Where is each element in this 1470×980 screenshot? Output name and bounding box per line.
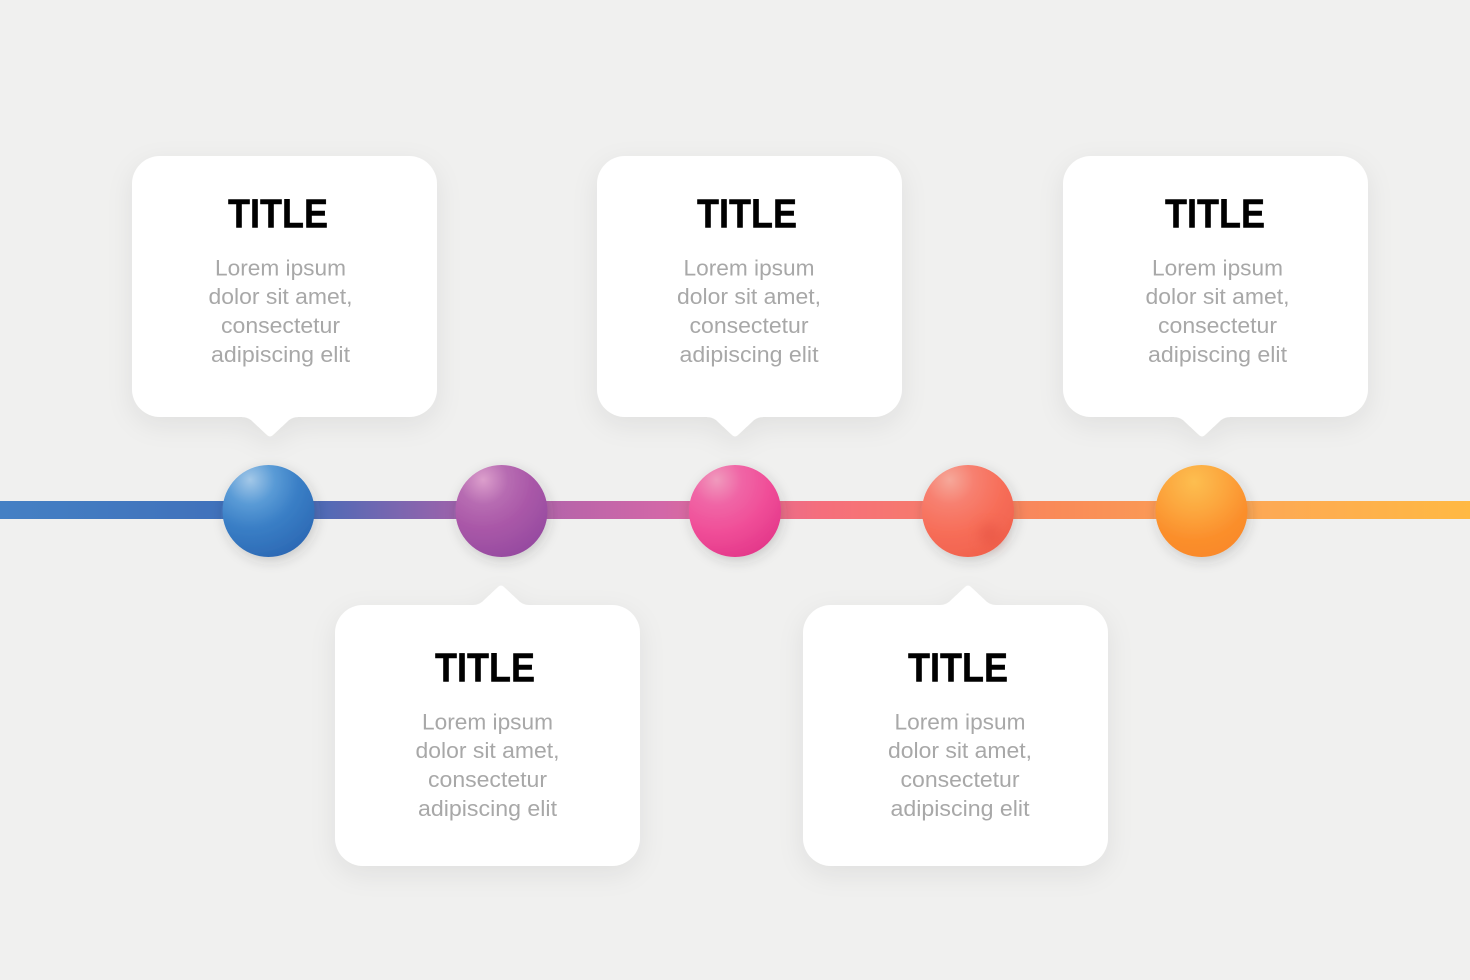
icon: orange sphere <box>1156 465 1248 557</box>
card 1 title: TITLE <box>228 190 328 236</box>
panel: card 4 <box>803 586 1108 866</box>
card 5 shape <box>1063 156 1368 436</box>
card 1 body text: consectetur <box>221 313 341 338</box>
card 1 shape <box>132 156 437 436</box>
card 2 body text: dolor sit amet, <box>416 738 560 763</box>
card 2 body text <box>416 710 560 821</box>
card 1 body text: dolor sit amet, <box>208 284 352 309</box>
card 2 title: TITLE <box>435 644 535 690</box>
card 2 body text: consectetur <box>428 767 548 792</box>
panel: card 2 <box>335 586 640 866</box>
card 2 shape <box>335 586 640 866</box>
icon: pink sphere <box>689 465 781 557</box>
card 4 body text: dolor sit amet, <box>888 738 1032 763</box>
icon: blue sphere <box>222 465 314 557</box>
panel: card 5 <box>1063 156 1368 436</box>
card 3 body text: consectetur <box>690 313 809 338</box>
card 1 body text <box>208 256 352 367</box>
card 1 body text: Lorem ipsum <box>215 256 346 280</box>
card 4 body text: consectetur <box>900 767 1020 792</box>
card 4 title: TITLE <box>908 644 1008 690</box>
timeline line <box>0 501 1470 519</box>
card 3 body text: dolor sit amet, <box>677 284 821 309</box>
card 1 body text: adipiscing elit <box>211 342 351 367</box>
panel: card 3 <box>597 156 902 436</box>
card 3 body text: Lorem ipsum <box>684 256 814 280</box>
card 2 body text: Lorem ipsum <box>422 710 553 734</box>
card 5 body text: consectetur <box>1158 313 1278 338</box>
card 5 body text: Lorem ipsum <box>1152 256 1283 280</box>
panel: card 1 <box>132 156 437 436</box>
card 5 body text: adipiscing elit <box>1148 342 1288 367</box>
card 5 title: TITLE <box>1165 190 1265 236</box>
card 5 body text: dolor sit amet, <box>1146 284 1290 309</box>
card 5 body text <box>1146 256 1290 367</box>
card 4 body text: Lorem ipsum <box>894 710 1026 734</box>
card 4 body text <box>888 710 1032 821</box>
card 4 shape <box>803 586 1108 866</box>
card 3 shape <box>597 156 902 436</box>
card 3 title: TITLE <box>697 190 797 236</box>
card 3 body text <box>677 256 821 367</box>
card 2 body text: adipiscing elit <box>418 796 558 821</box>
icon: purple sphere <box>456 465 548 557</box>
icon: coral sphere <box>922 465 1014 557</box>
card 4 body text: adipiscing elit <box>890 796 1030 821</box>
card 3 body text: adipiscing elit <box>680 342 819 367</box>
